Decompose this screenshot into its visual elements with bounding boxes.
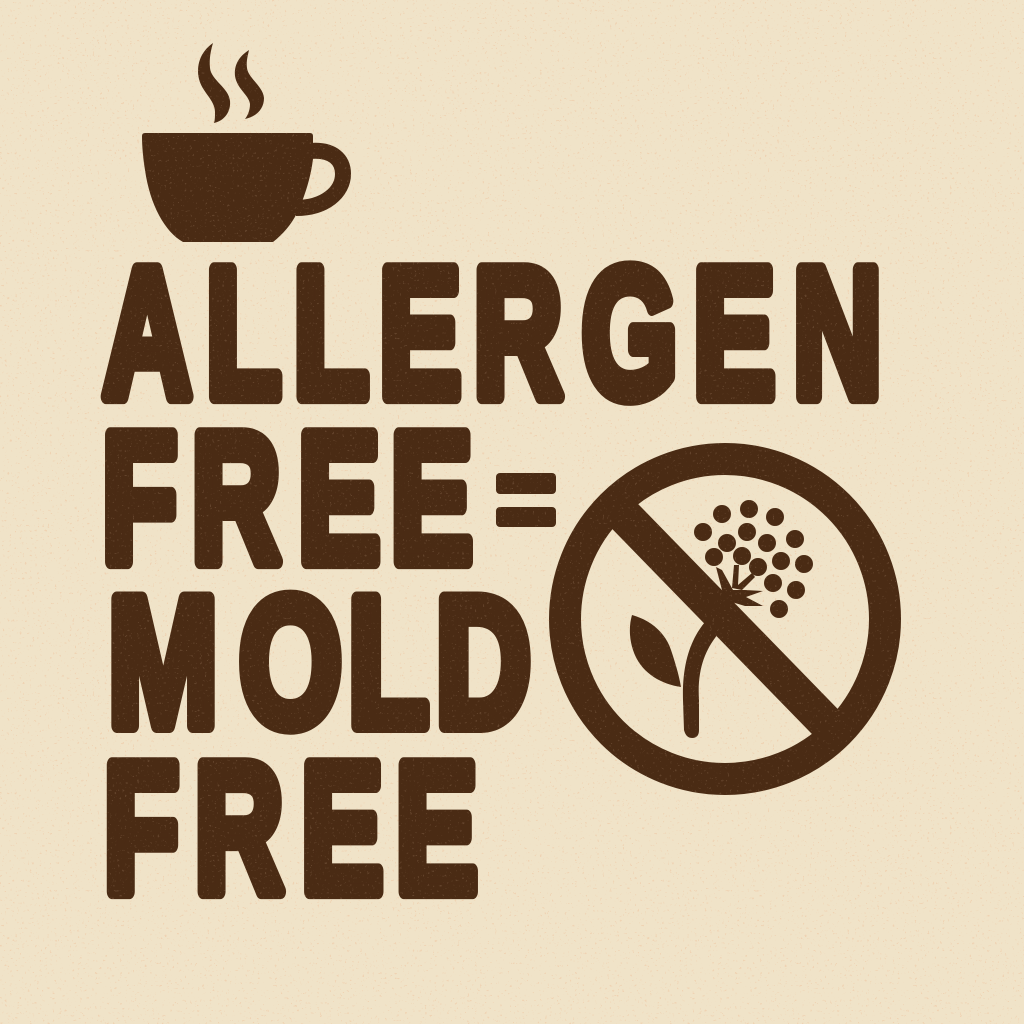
heading: ALLERGEN: ALLERGEN — [103, 231, 882, 436]
equals sign — [496, 473, 556, 527]
icon: prohibited allergen plant — [565, 459, 885, 779]
icon: prohibition slash — [612, 503, 838, 735]
icon: flower stem — [683, 622, 718, 738]
heading: FREE: FREE — [102, 396, 473, 601]
heading: FREE second line: FREE — [104, 726, 478, 931]
icon: prohibition ring — [565, 459, 885, 779]
icon: coffee cup with steam — [142, 43, 343, 242]
icon: cup handle — [296, 151, 343, 208]
icon: steam right — [235, 50, 264, 119]
icon: cup body — [142, 133, 313, 242]
heading: MOLD: MOLD — [108, 559, 531, 765]
icon: pollen dots — [694, 500, 813, 618]
icon: flower branches — [716, 565, 763, 606]
icon: leaf — [630, 615, 681, 687]
icon: steam left — [198, 43, 230, 123]
